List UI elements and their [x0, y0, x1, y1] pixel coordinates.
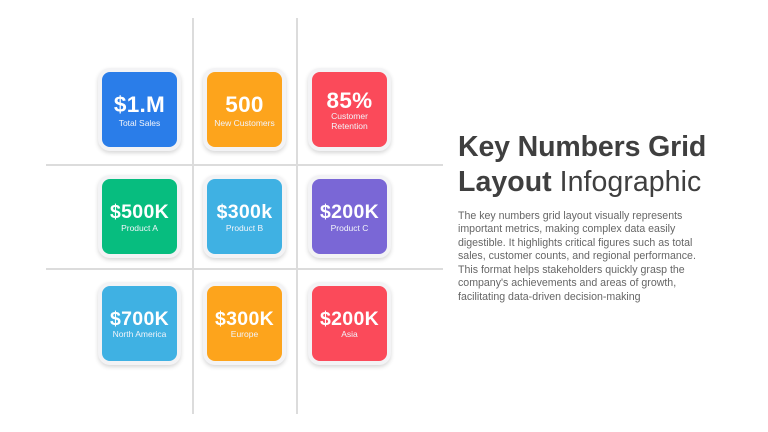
- card: total sales: [98, 68, 181, 151]
- card: customer retention: Customer: [331, 111, 368, 121]
- card: new customers: [203, 68, 286, 151]
- card: total sales: $1.M: [114, 92, 165, 117]
- body text: This format helps stakeholders quickly grasp the: [458, 264, 685, 276]
- body text: The key numbers grid layout visually represents: [458, 210, 682, 222]
- card: asia: $200K: [320, 308, 379, 330]
- card: new customers: New Customers: [214, 118, 275, 128]
- card: asia: Asia: [341, 329, 358, 339]
- body text: digestible. It highlights critical figures such as total: [458, 236, 692, 248]
- card: north america: [98, 282, 181, 365]
- card: total sales: Total Sales: [119, 118, 160, 128]
- card: europe: $300K: [215, 308, 274, 330]
- body text: company's achievements and areas of growth,: [458, 277, 676, 289]
- card: product c: [308, 175, 391, 258]
- title: Layout Infographic: [458, 166, 701, 198]
- card: product a: [98, 175, 181, 258]
- card: europe: [203, 282, 286, 365]
- body text: important metrics, making complex data easily: [458, 223, 675, 235]
- card: customer retention: 85%: [327, 88, 372, 113]
- card: customer retention: [308, 68, 391, 151]
- card: north america: $700K: [110, 308, 169, 330]
- body text: facilitating data-driven decision-making: [458, 290, 641, 302]
- card: europe: Europe: [231, 329, 258, 339]
- card: customer retention: Retention: [331, 121, 368, 131]
- title: [458, 131, 706, 198]
- body text: sales, customer counts, and regional performance.: [458, 250, 696, 262]
- card: product c: Product C: [331, 223, 368, 233]
- card: north america: North America: [113, 329, 166, 339]
- card: product b: $300k: [217, 201, 272, 223]
- card: asia: [308, 282, 391, 365]
- title: Key Numbers Grid: [458, 131, 706, 163]
- card: new customers: 500: [225, 92, 264, 117]
- card: product b: Product B: [226, 223, 263, 233]
- card: product c: $200K: [320, 201, 379, 223]
- card: product a: $500K: [110, 201, 169, 223]
- body text: [458, 210, 696, 302]
- card: product b: [203, 175, 286, 258]
- card: product a: Product A: [121, 223, 158, 233]
